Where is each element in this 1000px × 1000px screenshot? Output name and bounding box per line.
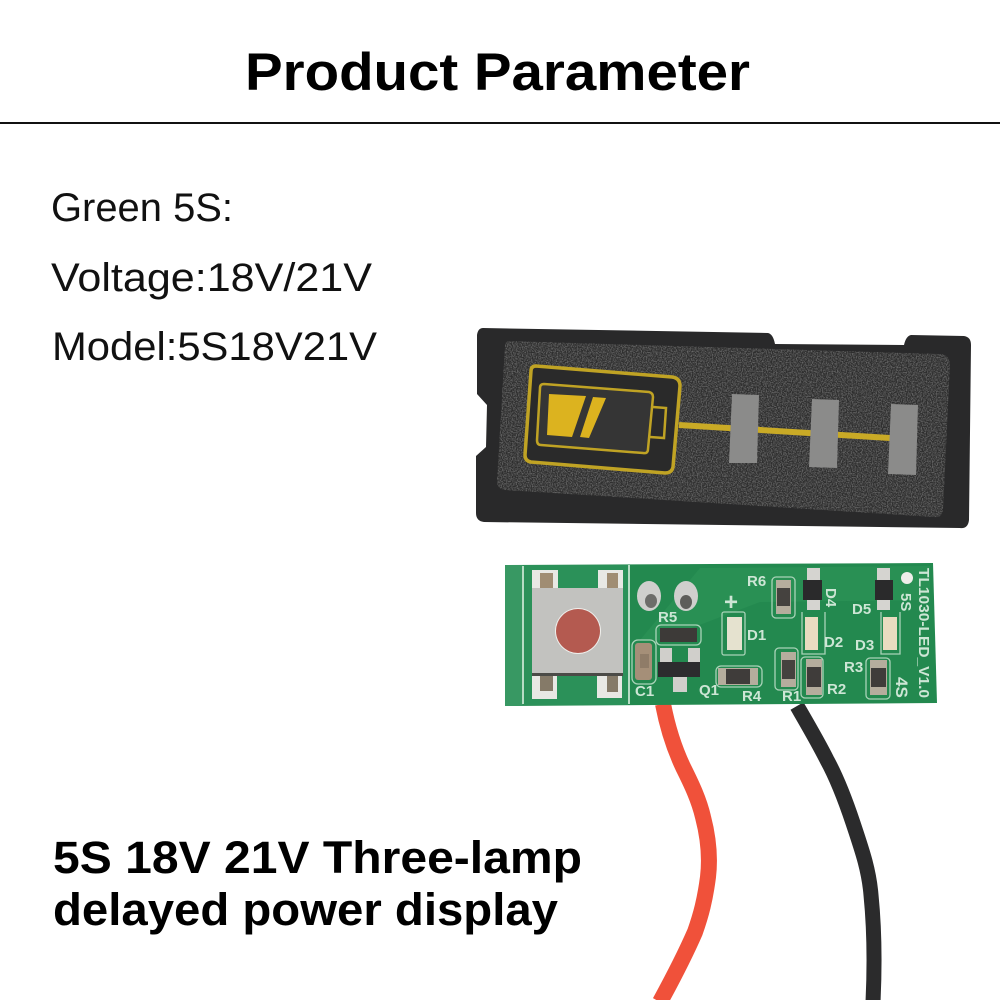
connecting line	[679, 425, 890, 438]
board labels: 5S	[897, 593, 914, 611]
parameter text block: Voltage:18V/21V	[51, 256, 372, 300]
parameter text block: Model:5S18V21V	[52, 325, 377, 369]
indicator window 1	[729, 394, 759, 463]
indicator window 2	[809, 399, 839, 468]
board labels: R2	[827, 681, 846, 698]
board labels: +	[724, 589, 738, 616]
board base	[505, 563, 937, 706]
silkscreen outlines	[632, 577, 900, 699]
parameter text block: Green 5S:	[51, 186, 233, 230]
title: Product Parameter	[245, 43, 750, 102]
indicator window 3	[888, 404, 918, 475]
caption: delayed power display	[53, 884, 558, 935]
battery icon	[525, 366, 680, 473]
red wire	[660, 704, 709, 1000]
board labels: 4S	[892, 677, 911, 698]
board labels: D1	[747, 627, 766, 644]
board labels	[635, 568, 932, 705]
black wire	[797, 706, 874, 1000]
board labels: D2	[824, 634, 843, 651]
caption: 5S 18V 21V Three-lamp	[53, 832, 582, 883]
board labels: C1	[635, 683, 654, 700]
sticker backing	[476, 328, 971, 528]
sticker face	[497, 341, 950, 517]
board labels: D3	[855, 637, 874, 654]
board labels: TL1030-LED_V1.0	[915, 568, 932, 698]
board labels: Q1	[699, 682, 719, 699]
board labels: R3	[844, 659, 863, 676]
display sticker	[476, 328, 971, 528]
tact switch	[532, 570, 623, 699]
board labels: R1	[782, 688, 801, 705]
solder points	[637, 581, 661, 611]
board labels: D5	[852, 601, 871, 618]
board labels: R5	[658, 609, 677, 626]
circuit board	[505, 563, 937, 706]
title divider	[0, 122, 1000, 124]
caption	[53, 832, 582, 935]
board labels: R6	[747, 573, 766, 590]
components	[632, 568, 913, 699]
parameter text block	[51, 186, 377, 369]
board labels: R4	[742, 688, 762, 705]
board labels: D4	[822, 588, 839, 608]
